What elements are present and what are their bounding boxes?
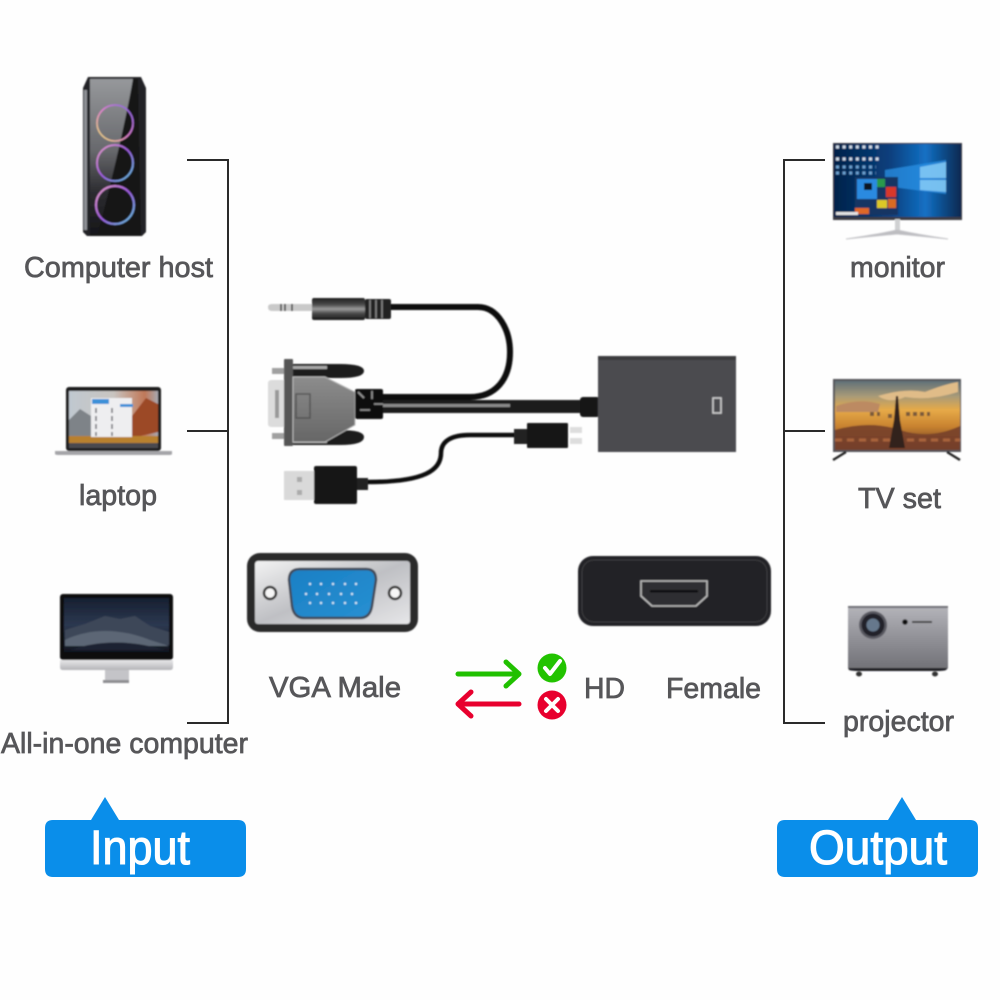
label: monitor: monitor — [850, 252, 945, 284]
icon: check mark — [538, 654, 566, 682]
audio jack — [268, 298, 391, 320]
callout: input: Input — [90, 822, 190, 875]
callout: output: Output — [809, 822, 947, 875]
icon: projector — [848, 606, 948, 676]
micro usb plug — [514, 423, 582, 448]
icon: cross mark — [538, 690, 566, 720]
icon: laptop — [55, 387, 172, 455]
label: laptop: laptop — [79, 480, 157, 512]
left bracket: input sources — [187, 160, 228, 723]
callout: output — [777, 797, 978, 877]
label: computer host: Computer host — [24, 252, 213, 284]
icon: monitor — [833, 143, 962, 239]
label: female: Female — [666, 673, 761, 705]
adapter cable illustration — [268, 298, 736, 504]
label: vga male: VGA Male — [269, 672, 401, 704]
vga port close-up — [247, 553, 418, 632]
icon: all-in-one computer — [60, 594, 173, 683]
right bracket: output devices — [784, 160, 825, 723]
label: projector: projector — [843, 706, 954, 738]
vga plug — [268, 359, 383, 446]
label: all-in-one computer: All-in-one computer — [1, 728, 248, 760]
adapter box — [580, 356, 736, 452]
usb power cable — [368, 435, 514, 482]
label: hd: HD — [584, 673, 625, 705]
label: TV set: TV set — [858, 483, 941, 515]
hd port close-up — [578, 556, 771, 626]
arrow: green forward — [458, 662, 519, 686]
usb a plug — [284, 466, 368, 504]
twin vga cable — [380, 400, 580, 413]
audio cable — [380, 307, 510, 397]
callout: input — [45, 797, 246, 877]
icon: computer tower — [83, 77, 146, 236]
icon: TV set — [833, 379, 961, 460]
arrow: red backward — [458, 692, 519, 716]
